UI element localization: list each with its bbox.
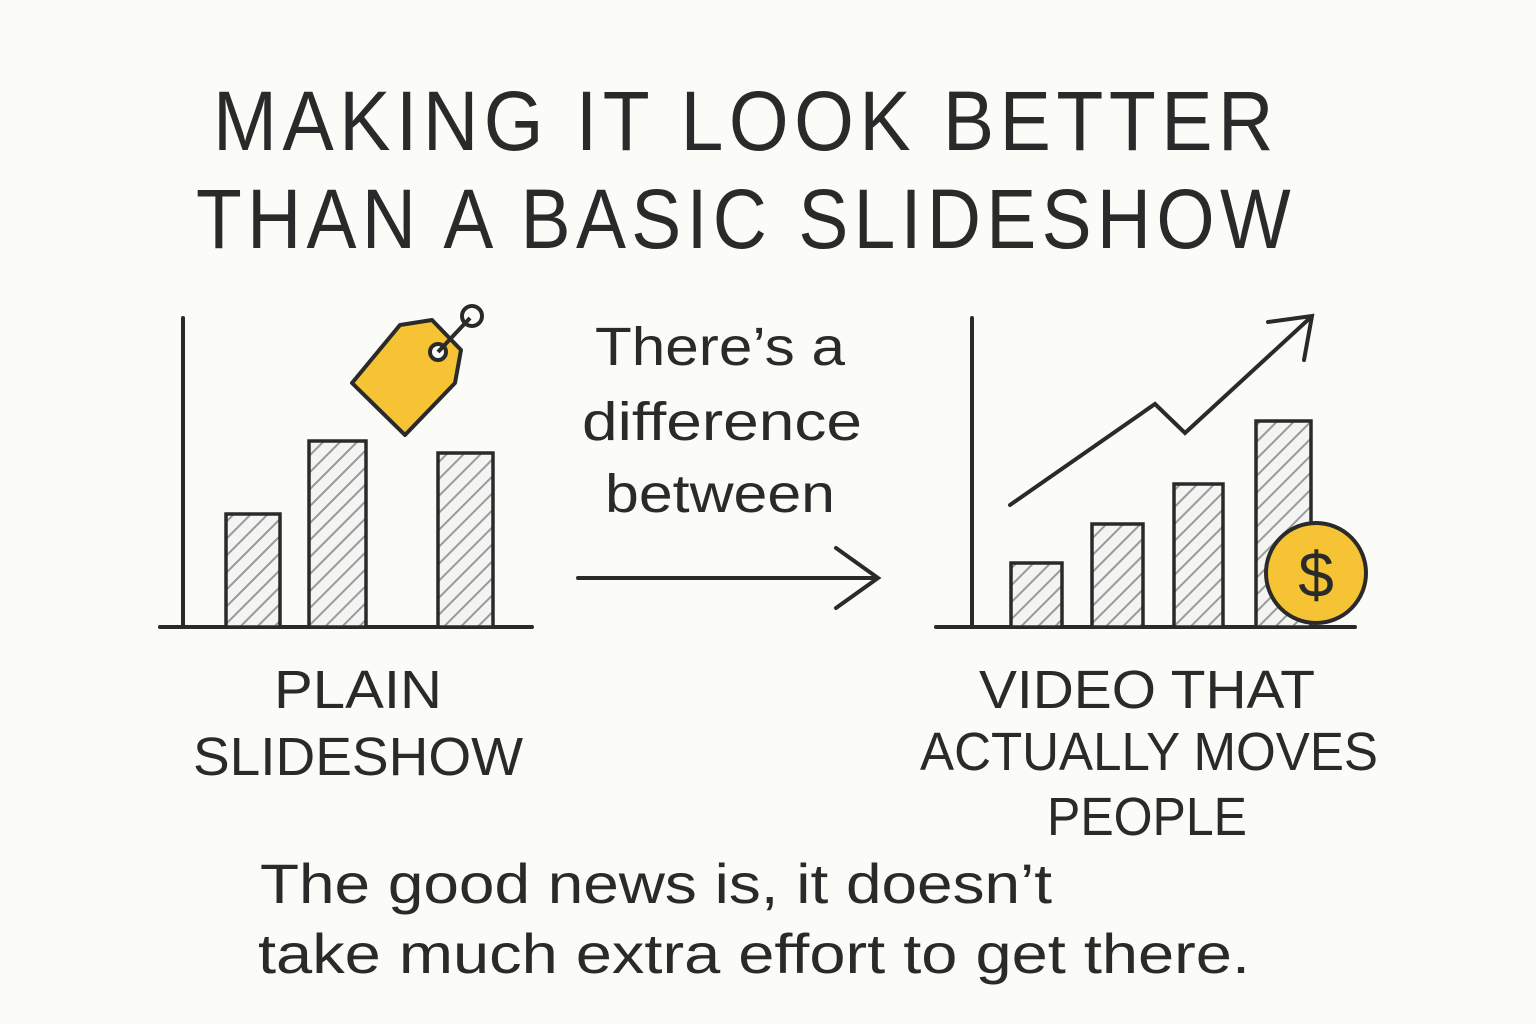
bottom text	[258, 852, 1250, 985]
label: plain slideshow: PLAIN	[274, 660, 442, 720]
bottom text: The good news is, it doesn’t	[260, 852, 1052, 915]
bottom text: take much extra effort to get there.	[258, 922, 1250, 985]
title: MAKING IT LOOK BETTER	[213, 74, 1279, 168]
title	[196, 74, 1296, 266]
label: plain slideshow: SLIDESHOW	[193, 727, 523, 787]
label: video: VIDEO THAT	[979, 660, 1315, 720]
label: video: PEOPLE	[1047, 787, 1247, 847]
chart: plain slideshow	[160, 318, 532, 627]
chart: video	[936, 316, 1355, 627]
label: video	[920, 660, 1378, 847]
middle text: between	[605, 464, 835, 524]
label: plain slideshow	[193, 660, 523, 787]
middle text: There’s a	[595, 317, 846, 377]
title: THAN A BASIC SLIDESHOW	[196, 172, 1296, 266]
middle text: difference	[582, 392, 862, 452]
icon: coin	[1266, 523, 1366, 623]
icon: price tag	[352, 306, 482, 435]
label: video: ACTUALLY MOVES	[920, 722, 1378, 782]
arrow	[578, 548, 878, 608]
icon: coin: $	[1298, 539, 1334, 611]
middle text	[582, 317, 862, 524]
